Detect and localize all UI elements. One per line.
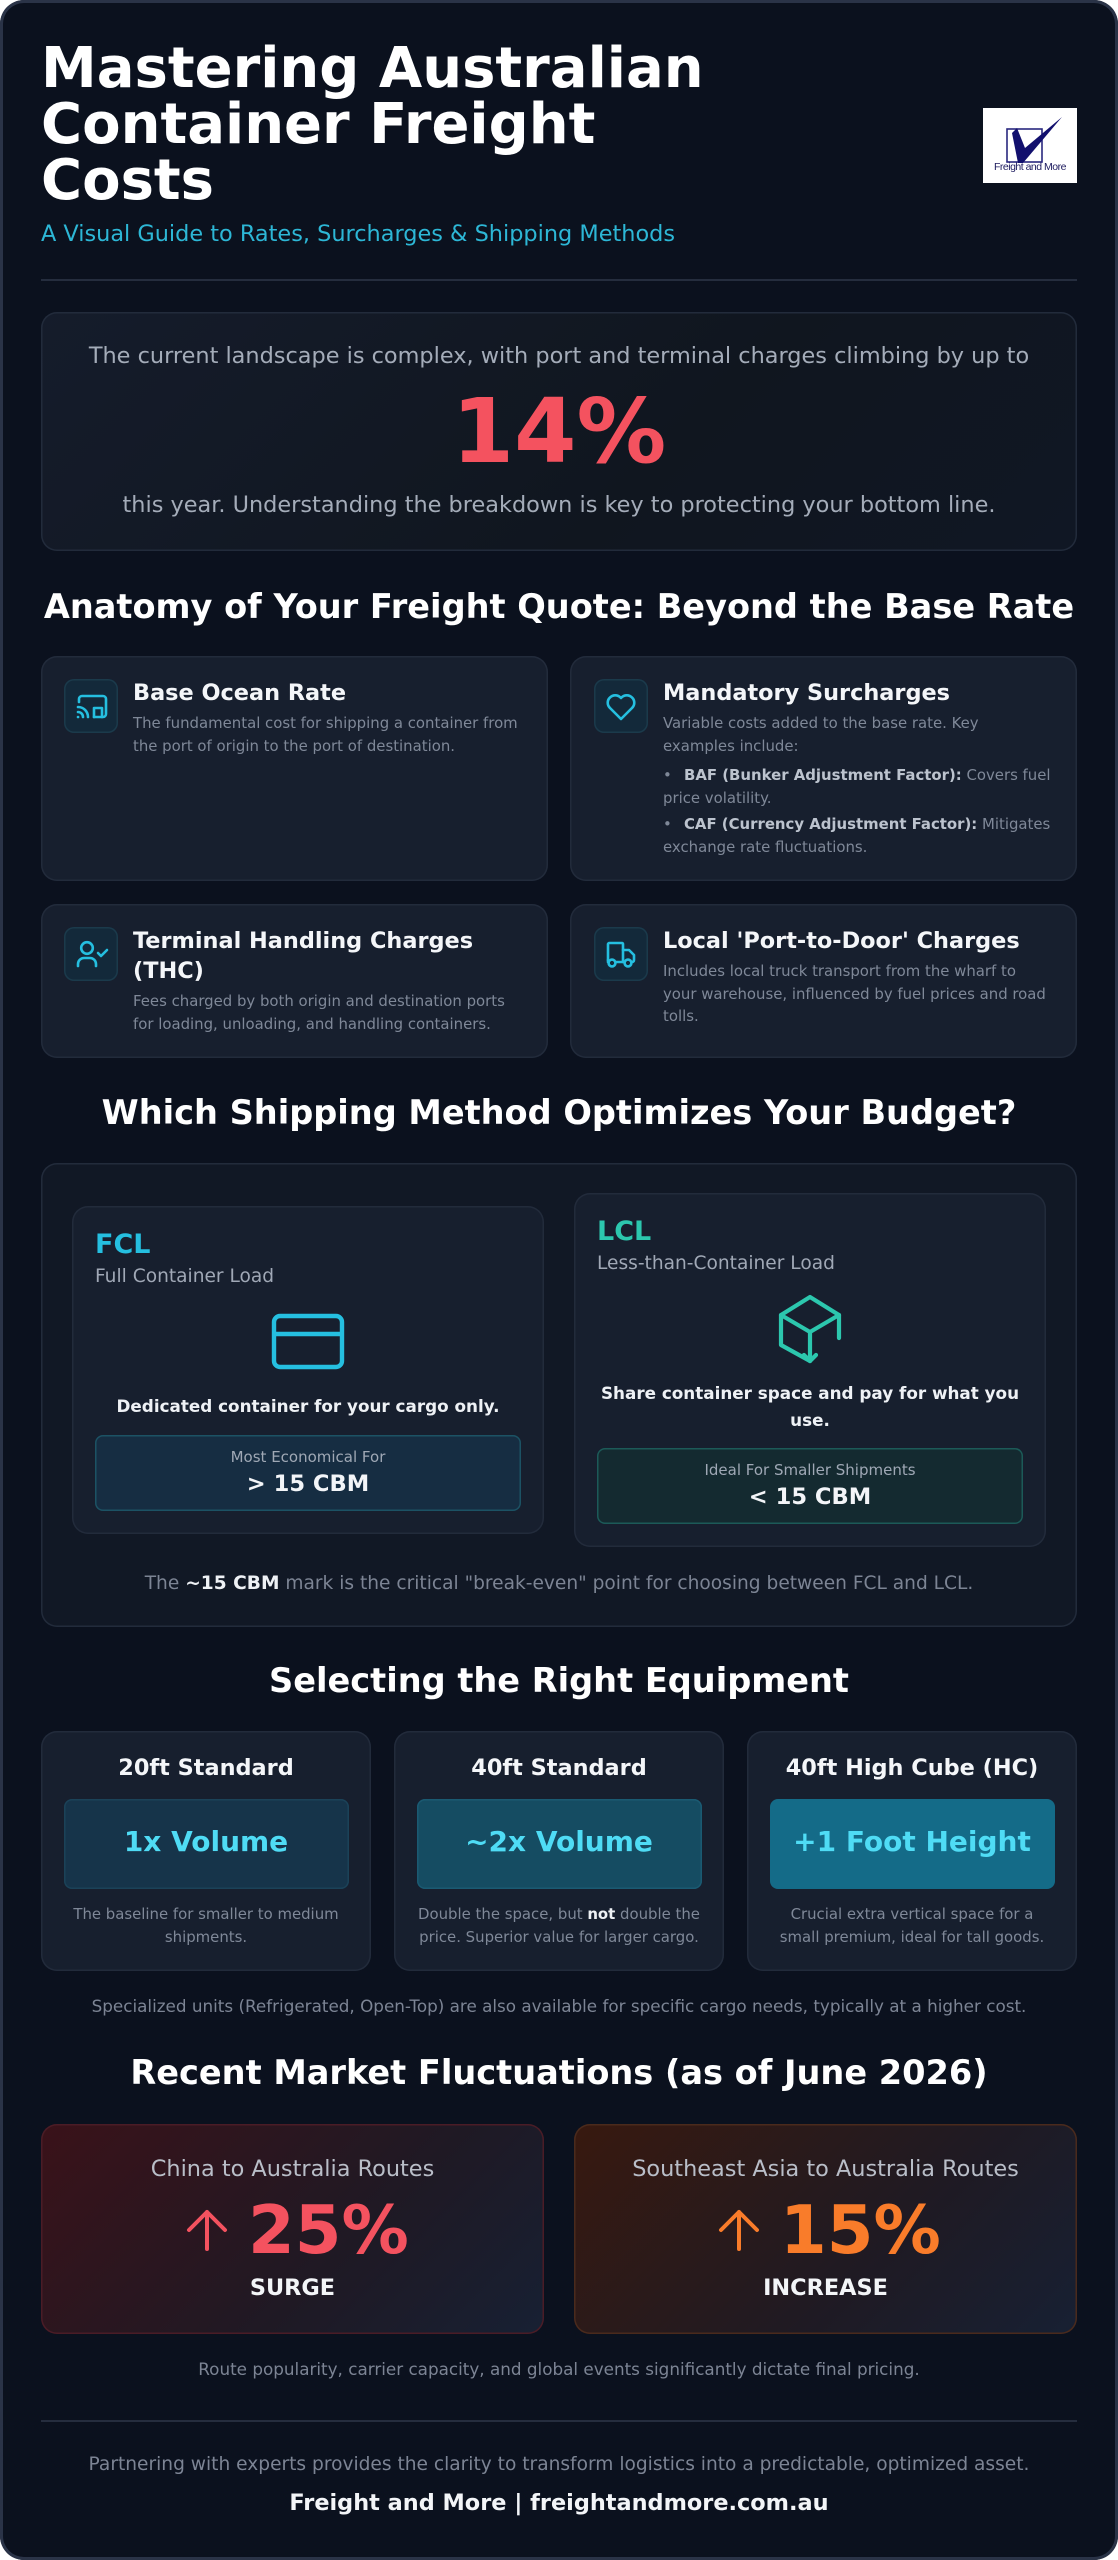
panel: local port to door charges (570, 904, 1077, 1058)
FCL label: FCL (95, 1229, 150, 1260)
card description: for loading, unloading, and handling containers. (133, 1015, 491, 1033)
icon: cast (64, 679, 118, 733)
hero text bottom: this year. Understanding the breakdown is key to protecting your bottom line. (122, 492, 995, 518)
hero stat 14%: 14% (452, 380, 666, 484)
equipment description: small premium, ideal for tall goods. (780, 1928, 1044, 1946)
equipment description (780, 1905, 1044, 1946)
percent value: 15% (780, 2191, 941, 2269)
threshold label: Most Economical For (231, 1448, 385, 1466)
equipment description (418, 1905, 700, 1946)
card description and list: exchange rate fluctuations. (663, 838, 867, 856)
card description and list: examples include: (663, 737, 799, 755)
panel: Southeast Asia route (574, 2124, 1077, 2334)
hero text top: The current landscape is complex, with port and terminal charges climbing by up to (89, 343, 1029, 369)
equipment description: The baseline for smaller to medium (73, 1905, 339, 1923)
route label: China to Australia Routes (151, 2156, 434, 2182)
panel: China route (41, 2124, 544, 2334)
threshold value: < 15 CBM (749, 1484, 871, 1510)
panel: mandatory surcharges (570, 656, 1077, 881)
card description and list: BAF (Bunker Adjustment Factor): Covers fuel (684, 766, 1051, 784)
icon: truck (594, 927, 648, 981)
icon: user check (64, 927, 118, 981)
card title: (THC) (133, 958, 204, 984)
icon: heart (594, 679, 648, 733)
volume box (64, 1799, 349, 1889)
volume value: +1 Foot Height (793, 1825, 1031, 1858)
card description: The fundamental cost for shipping a container from (133, 714, 518, 732)
panel: base ocean rate (41, 656, 548, 881)
card description (133, 992, 505, 1033)
increase figure with arrow (718, 2191, 941, 2269)
volume value: ~2x Volume (465, 1825, 653, 1858)
card description and list (663, 714, 1051, 856)
card description: the port of origin to the port of destination. (133, 737, 455, 755)
FCL subtitle: Full Container Load (95, 1266, 274, 1287)
FCL description: Dedicated container for your cargo only. (116, 1396, 500, 1416)
header: title block (41, 36, 704, 213)
card: LCL (574, 1193, 1046, 1547)
card title (133, 928, 473, 984)
card description and list: • (663, 766, 672, 784)
card description and list: CAF (Currency Adjustment Factor): Mitigates (684, 815, 1050, 833)
increase label: INCREASE (763, 2275, 888, 2301)
break-even note: The ~15 CBM mark is the critical "break-even" point for choosing between FCL and LCL. (145, 1573, 973, 1594)
panel: 20ft standard (41, 1731, 371, 1971)
LCL threshold box (597, 1448, 1023, 1524)
icon: up arrow (186, 2210, 228, 2251)
card description: your warehouse, influenced by fuel prices and road (663, 985, 1046, 1003)
panel: terminal handling charges (41, 904, 548, 1058)
FCL threshold box (95, 1435, 521, 1511)
specialized units note: Specialized units (Refrigerated, Open-Top) are also available for specific cargo needs, typically at a higher cost. (92, 1996, 1026, 2016)
card title: Local 'Port-to-Door' Charges (663, 928, 1020, 954)
equipment description: Double the space, but not double the (418, 1905, 700, 1923)
card: FCL (72, 1206, 544, 1534)
panel: FCL vs LCL comparison (41, 1163, 1077, 1627)
percent value: 25% (248, 2191, 409, 2269)
equipment description: Crucial extra vertical space for a (791, 1905, 1033, 1923)
title line 3: Costs (41, 148, 214, 213)
volume value: 1x Volume (124, 1825, 288, 1858)
card description and list: price volatility. (663, 789, 772, 807)
surge figure with arrow (186, 2191, 409, 2269)
card description: tolls. (663, 1007, 699, 1025)
card title: Base Ocean Rate (133, 680, 346, 706)
card description: Includes local truck transport from the wharf to (663, 962, 1016, 980)
equipment description (73, 1905, 339, 1946)
card description (663, 962, 1046, 1025)
heading: equipment: Selecting the Right Equipment (269, 1661, 849, 1700)
equipment description: shipments. (165, 1928, 247, 1946)
icon: up arrow (718, 2210, 760, 2251)
icon: container (272, 1314, 344, 1370)
panel: 40ft high cube (747, 1731, 1077, 1971)
logo: Freight and More (983, 108, 1077, 183)
title line 2: Container Freight (41, 92, 595, 157)
volume box (417, 1799, 702, 1889)
surge label: SURGE (250, 2275, 335, 2301)
equipment title: 40ft Standard (471, 1755, 647, 1781)
equipment title: 40ft High Cube (HC) (786, 1755, 1038, 1781)
card title: Mandatory Surcharges (663, 680, 950, 706)
title line 1: Mastering Australian (41, 36, 704, 101)
heading: anatomy: Anatomy of Your Freight Quote: Beyond the Base Rate (44, 587, 1074, 626)
icon: package (778, 1294, 842, 1364)
card description and list: • (663, 815, 672, 833)
subtitle: A Visual Guide to Rates, Surcharges & Shipping Methods (41, 221, 675, 247)
equipment title: 20ft Standard (118, 1755, 294, 1781)
volume box (770, 1799, 1055, 1889)
LCL description: use. (790, 1410, 830, 1430)
card description and list: Variable costs added to the base rate. Key (663, 714, 979, 732)
panel: 40ft standard (394, 1731, 724, 1971)
market note: Route popularity, carrier capacity, and global events significantly dictate final pricing. (198, 2359, 920, 2379)
card description (132, 714, 518, 755)
card title: Terminal Handling Charges (133, 928, 473, 954)
route label: Southeast Asia to Australia Routes (632, 2156, 1019, 2182)
LCL description (601, 1383, 1019, 1430)
LCL description: Share container space and pay for what you (601, 1383, 1019, 1403)
heading: market fluctuations: Recent Market Fluctuations (as of June 2026) (130, 2053, 988, 2092)
panel: hero statistic (41, 312, 1077, 551)
equipment description: price. Superior value for larger cargo. (419, 1928, 699, 1946)
threshold label: Ideal For Smaller Shipments (704, 1461, 916, 1479)
heading: shipping method: Which Shipping Method Optimizes Your Budget? (102, 1093, 1016, 1132)
LCL label: LCL (597, 1216, 651, 1247)
LCL subtitle: Less-than-Container Load (597, 1253, 835, 1274)
footer brand: Freight and More | freightandmore.com.au (289, 2490, 829, 2516)
footer text: Partnering with experts provides the clarity to transform logistics into a predictable, optimized asset. (89, 2454, 1029, 2475)
logo: Freight and More: Freight and More (994, 161, 1067, 173)
card description: Fees charged by both origin and destination ports (133, 992, 505, 1010)
threshold value: > 15 CBM (247, 1471, 369, 1497)
